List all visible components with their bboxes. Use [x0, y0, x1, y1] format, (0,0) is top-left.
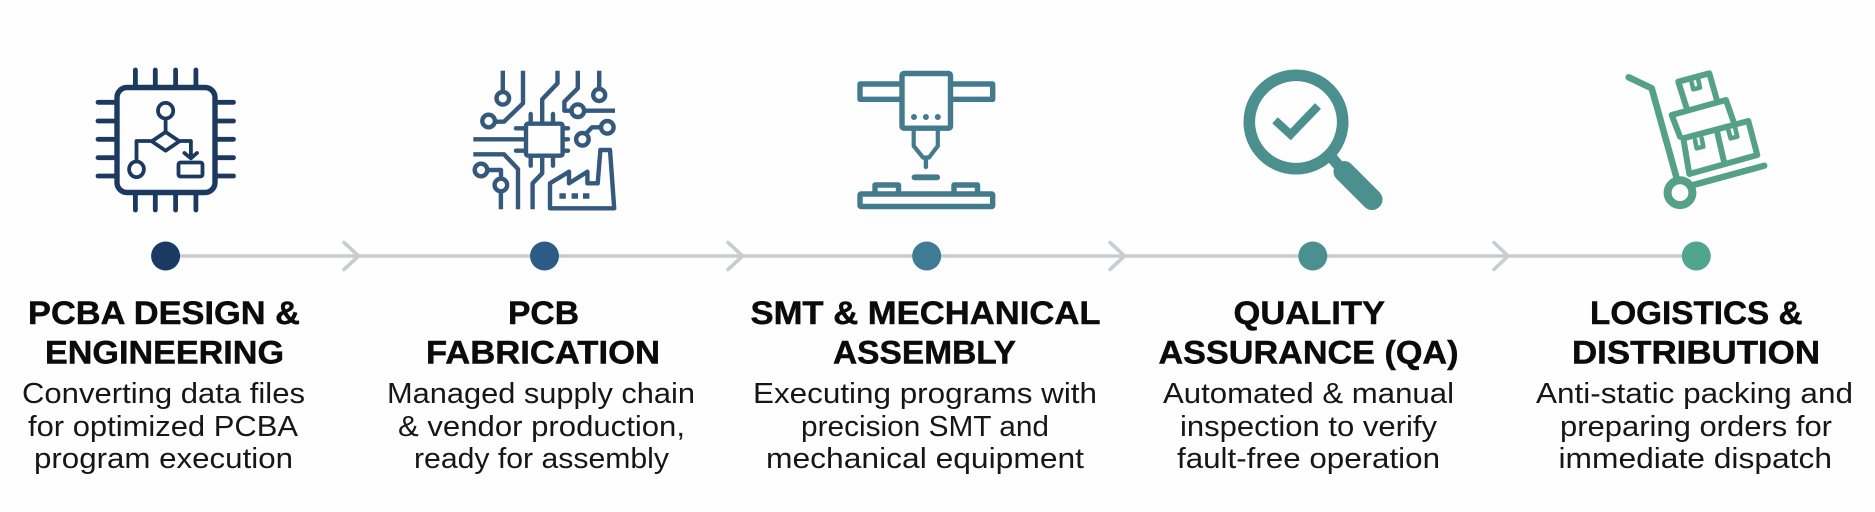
- heading: LOGISTICS &: [1590, 295, 1802, 331]
- description: Managed supply chain: [387, 378, 695, 410]
- description: mechanical equipment: [766, 443, 1084, 475]
- timeline connector with arrows: [165, 242, 1696, 270]
- description: [387, 378, 695, 475]
- description: program execution: [34, 443, 293, 475]
- heading: ASSEMBLY: [833, 334, 1016, 370]
- description: inspection to verify: [1180, 411, 1438, 443]
- icon: circuit traces and factory: [473, 71, 615, 209]
- icon: pick and place machine: [860, 74, 993, 206]
- heading: PCB: [508, 295, 579, 331]
- heading: PCBA DESIGN &: [28, 295, 300, 331]
- heading: QUALITY: [1234, 295, 1385, 331]
- panel: PCBA design and engineering: [22, 70, 305, 475]
- description: & vendor production,: [398, 411, 685, 443]
- icon: magnifying glass with check: [1249, 75, 1372, 200]
- heading: [1158, 295, 1458, 370]
- heading: DISTRIBUTION: [1572, 334, 1820, 370]
- icon: chip with flowchart: [98, 70, 234, 210]
- description: fault-free operation: [1177, 443, 1440, 475]
- description: Automated & manual: [1163, 378, 1454, 410]
- heading: ASSURANCE (QA): [1158, 334, 1458, 370]
- panel: quality assurance: [1158, 75, 1458, 475]
- description: Anti-static packing and: [1536, 378, 1853, 410]
- icon: hand truck with boxes: [1629, 73, 1764, 205]
- description: precision SMT and: [801, 411, 1049, 443]
- description: Converting data files: [22, 378, 305, 410]
- description: ready for assembly: [414, 443, 670, 475]
- description: immediate dispatch: [1558, 443, 1832, 475]
- heading: [426, 295, 660, 370]
- heading: FABRICATION: [426, 334, 660, 370]
- description: [22, 378, 305, 475]
- description: for optimized PCBA: [28, 411, 299, 443]
- step marker 1: [151, 242, 180, 270]
- heading: SMT & MECHANICAL: [750, 295, 1100, 331]
- step marker 3: [912, 242, 941, 270]
- description: [1536, 378, 1853, 475]
- description: preparing orders for: [1560, 411, 1832, 443]
- panel: SMT and mechanical assembly: [750, 74, 1100, 475]
- step marker 2: [530, 242, 559, 270]
- panel: PCB fabrication: [387, 71, 695, 475]
- heading: ENGINEERING: [45, 334, 284, 370]
- step marker 4: [1298, 242, 1327, 270]
- heading: [28, 295, 300, 370]
- description: [753, 378, 1097, 475]
- description: Executing programs with: [753, 378, 1097, 410]
- heading: [750, 295, 1100, 370]
- step marker 5: [1682, 242, 1711, 270]
- panel: logistics and distribution: [1536, 73, 1853, 475]
- heading: [1572, 295, 1820, 370]
- description: [1163, 378, 1454, 475]
